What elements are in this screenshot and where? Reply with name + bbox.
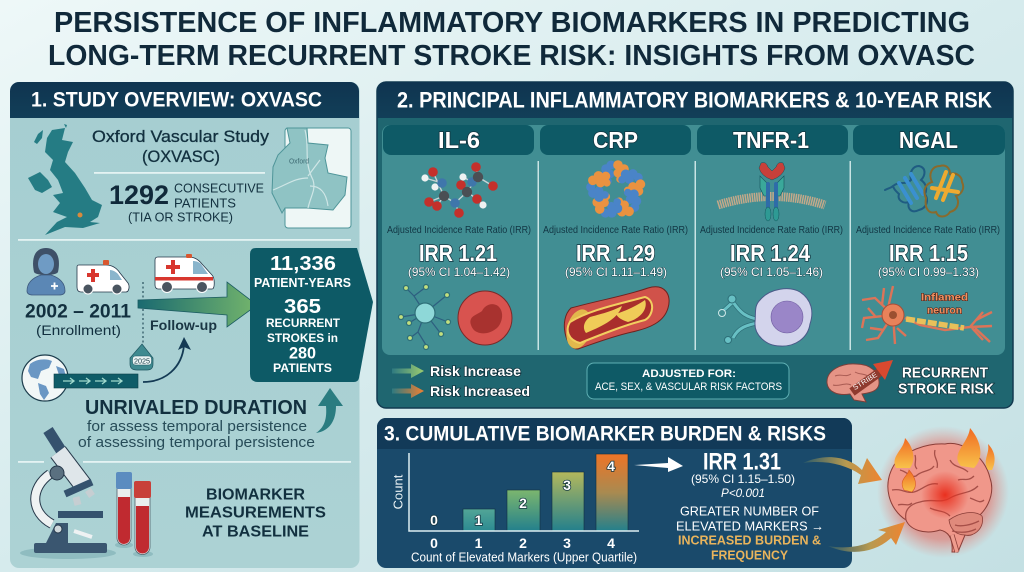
text: cumulative IRR: INCREASED BURDEN & <box>678 532 821 548</box>
text: unrivaled duration: of assessing temporal persistence <box>78 435 315 451</box>
callout: adjusted for <box>587 363 789 399</box>
stats box: PATIENTS <box>273 361 332 375</box>
icon: inflamed brain <box>877 426 1009 558</box>
icon: red blood cell <box>458 291 512 345</box>
column: IL-6: Adjusted Incidence Rate Ratio (IRR) <box>387 224 531 236</box>
text: enrollment dates <box>25 302 131 338</box>
bar chart: 2 <box>519 495 527 511</box>
column: NGAL: NGAL <box>899 127 958 153</box>
icon: UK map <box>28 124 102 235</box>
icon: patient <box>27 248 65 295</box>
column: CRP: Adjusted Incidence Rate Ratio (IRR) <box>543 224 688 236</box>
stats box: 280 <box>289 344 316 362</box>
stats box <box>250 248 373 382</box>
column: IL-6: (95% CI 1.04–1.42) <box>408 265 510 279</box>
icon: CRP protein <box>582 160 649 224</box>
title: PERSISTENCE OF INFLAMMATORY BIOMARKERS IN PREDICTING <box>54 7 970 39</box>
stats box: RECURRENT <box>266 316 341 330</box>
heading: principal biomarkers <box>377 82 1013 118</box>
column: NGAL: Adjusted Incidence Rate Ratio (IRR) <box>856 224 1000 236</box>
bar chart: 3 <box>563 477 571 493</box>
icon: globe and timeline <box>22 355 138 401</box>
column: IL-6 <box>383 125 534 350</box>
text: biomarker measurements: MEASUREMENTS <box>185 504 326 522</box>
icon: 2025 marker <box>130 344 153 370</box>
text: unrivaled duration: UNRIVALED DURATION <box>85 397 307 419</box>
column: CRP: CRP <box>593 127 638 153</box>
callout: adjusted for: ACE, SEX, & VASCULAR RISK FACTORS <box>595 381 782 393</box>
stats box: STROKES in <box>267 331 338 345</box>
bar chart: 1 <box>475 535 483 551</box>
stats box: 365 <box>284 296 321 318</box>
icon: NGAL protein <box>885 165 963 216</box>
bar chart: Count <box>390 474 406 509</box>
text: cumulative IRR: IRR 1.31 <box>703 448 781 476</box>
column: TNFR-1 <box>697 125 848 346</box>
heading: study overview <box>10 82 359 118</box>
arrow: curved follow-up <box>143 337 191 382</box>
legend: Risk Increase <box>430 363 521 379</box>
icon: inflamed neuron: neuron <box>927 306 962 316</box>
text: patient count: PATIENTS <box>174 196 236 210</box>
text: unrivaled duration: for assess temporal persistence <box>87 419 307 435</box>
title <box>48 7 975 72</box>
column: CRP: IRR 1.29 <box>576 240 655 266</box>
icon: microscope <box>20 430 116 559</box>
bar chart <box>390 453 639 564</box>
bar chart: 1 <box>475 512 483 528</box>
text: follow-up <box>143 282 217 345</box>
text: recurrent stroke risk <box>898 364 994 398</box>
text: follow-up: Follow-up <box>150 317 217 333</box>
panel: cumulative burden <box>377 418 852 568</box>
panel: principal biomarkers <box>377 82 1013 408</box>
icon: blood tubes <box>115 472 153 557</box>
text: enrollment dates: (Enrollment) <box>36 322 121 338</box>
text: patient count: 1292 <box>109 180 169 210</box>
text: study name: Oxford Vascular Study <box>92 128 270 146</box>
column: TNFR-1: Adjusted Incidence Rate Ratio (IRR) <box>700 224 843 236</box>
column: CRP <box>540 125 691 351</box>
text: cumulative IRR: P<0.001 <box>721 486 765 500</box>
text: enrollment dates: 2002 – 2011 <box>25 302 131 322</box>
icon: TNFR receptor <box>718 162 825 221</box>
column: NGAL: (95% CI 0.99–1.33) <box>878 265 979 279</box>
icon: inflamed neuron <box>862 286 992 344</box>
text: patient count <box>109 180 264 224</box>
column: TNFR-1: TNFR-1 <box>733 127 809 153</box>
icon: ambulance small <box>77 260 129 294</box>
panel: study overview <box>10 82 373 568</box>
icon: inflamed neuron: Inflamed <box>921 292 968 304</box>
arrow: green follow-up <box>138 282 257 327</box>
bar chart: 2 <box>519 535 527 551</box>
icon: ambulance large <box>155 254 214 292</box>
column: CRP: (95% CI 1.11–1.49) <box>565 265 667 279</box>
text: cumulative IRR: ELEVATED MARKERS → <box>676 518 824 534</box>
text: study name: (OXVASC) <box>142 148 220 166</box>
heading: study overview: 1. STUDY OVERVIEW: OXVASC <box>31 88 322 112</box>
bar chart: 3 <box>563 535 571 551</box>
column: IL-6: IL-6 <box>438 127 480 153</box>
text: unrivaled duration <box>78 397 315 451</box>
arrow: burden to brain <box>828 522 905 552</box>
icon: macrophage <box>718 289 812 346</box>
text: cumulative IRR <box>676 448 824 562</box>
column: TNFR-1: IRR 1.24 <box>730 240 810 266</box>
text: cumulative IRR: GREATER NUMBER OF <box>680 504 819 518</box>
arrow: IRR to brain <box>803 457 882 484</box>
bar chart: 4 <box>607 535 615 551</box>
text: biomarker measurements <box>185 486 326 540</box>
stats box: 11,336 <box>270 253 336 275</box>
icon: brain with stroke arrow <box>827 360 893 402</box>
arrow: chart to IRR <box>634 457 683 472</box>
icon: artery plaque <box>562 287 669 351</box>
text: recurrent stroke risk: RECURRENT <box>902 364 988 382</box>
legend <box>392 363 530 399</box>
callout: adjusted for: ADJUSTED FOR: <box>642 368 736 380</box>
bar chart: 4 <box>607 458 615 474</box>
icon: 2025 marker: 2025 <box>134 356 150 365</box>
icon: Oxfordshire map: Oxford <box>289 158 309 166</box>
column: NGAL: IRR 1.15 <box>889 240 968 266</box>
title: LONG-TERM RECURRENT STROKE RISK: INSIGHTS FROM OXVASC <box>48 40 975 72</box>
icon: IL-6 molecule <box>421 162 498 218</box>
text: patient count: (TIA OR STROKE) <box>128 210 233 224</box>
icon: brain with stroke arrow: STRIBE <box>852 372 879 392</box>
text: cumulative IRR: (95% CI 1.15–1.50) <box>691 472 795 486</box>
stats box: PATIENT-YEARS <box>254 276 351 290</box>
icon: immune cell <box>398 284 450 350</box>
bar chart: 0 <box>430 535 438 551</box>
text: study name <box>92 128 270 166</box>
icon: Oxfordshire map <box>272 128 351 228</box>
text: patient count: CONSECUTIVE <box>174 180 264 196</box>
column: NGAL <box>853 125 1005 344</box>
text: biomarker measurements: AT BASELINE <box>202 524 309 540</box>
text: cumulative IRR: FREQUENCY <box>711 548 788 562</box>
text: biomarker measurements: BIOMARKER <box>206 486 305 504</box>
arrow: teal upward <box>316 388 343 433</box>
heading: cumulative burden: 3. CUMULATIVE BIOMARKER BURDEN & RISKS <box>384 422 826 446</box>
text: recurrent stroke risk: STROKE RISK <box>898 380 994 398</box>
bar chart: Count of Elevated Markers (Upper Quartile) <box>411 550 637 564</box>
column: TNFR-1: (95% CI 1.05–1.46) <box>720 265 823 279</box>
column: IL-6: IRR 1.21 <box>419 240 497 266</box>
bar chart: 0 <box>430 512 438 528</box>
legend: Risk Increased <box>430 383 530 399</box>
